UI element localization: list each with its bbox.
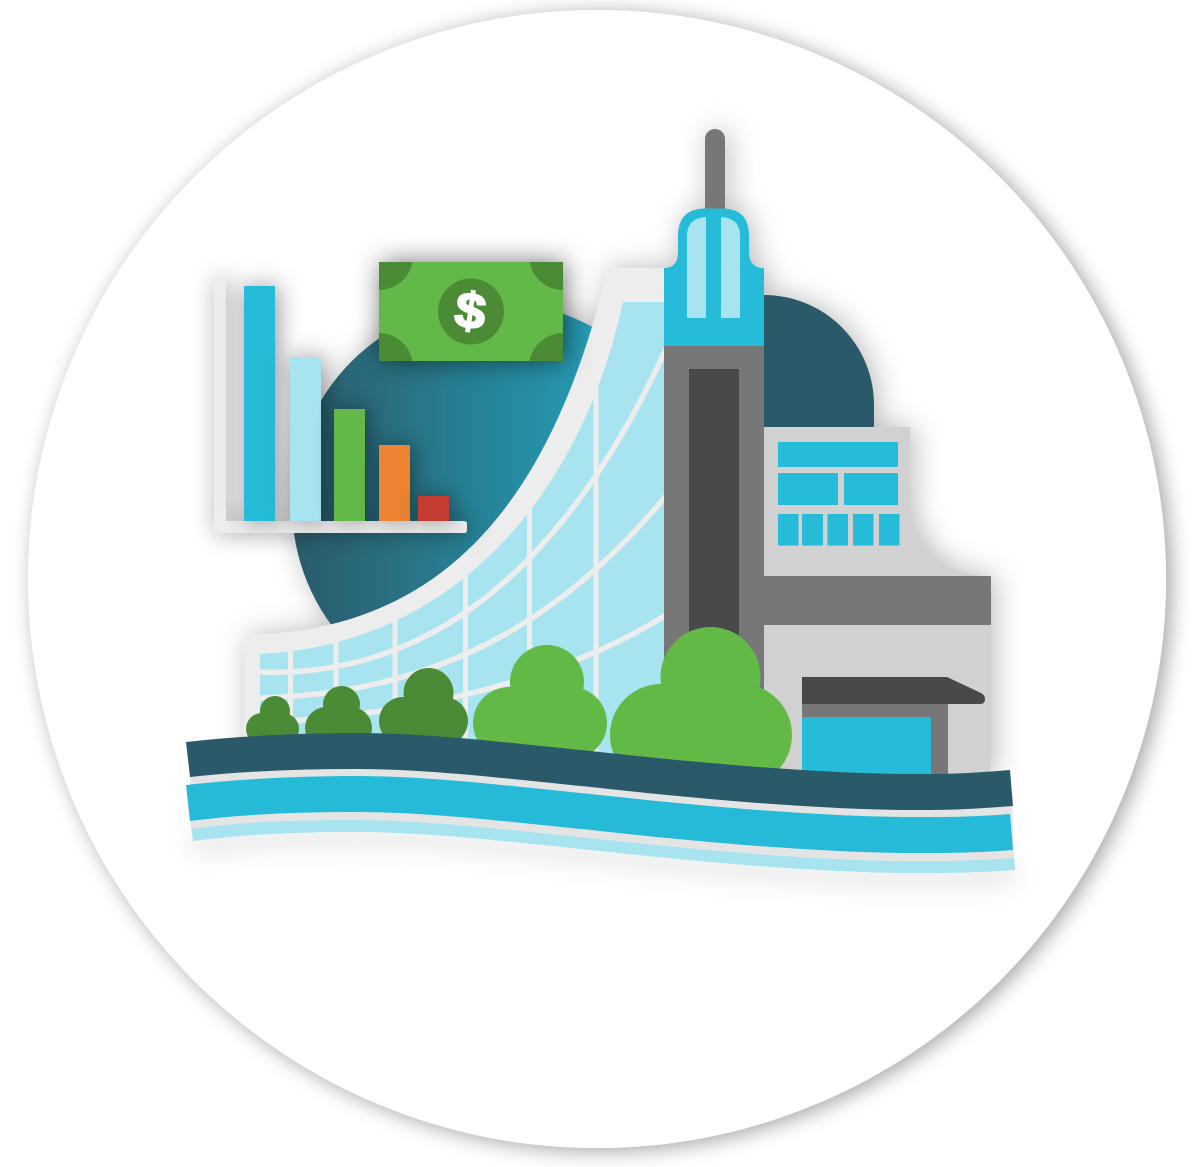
tree 3 xyxy=(379,668,468,745)
office windows xyxy=(778,442,900,546)
grey separator xyxy=(190,761,1014,861)
bar: green xyxy=(334,409,365,521)
teal globe behind buildings xyxy=(292,302,698,708)
trees xyxy=(246,627,792,786)
road and river bands xyxy=(186,733,1015,873)
tower body xyxy=(664,346,764,776)
light water band xyxy=(191,820,1015,873)
tree 4 xyxy=(473,645,607,759)
bar: orange xyxy=(379,445,410,521)
door frame xyxy=(802,700,948,775)
chart axis and shelf xyxy=(214,279,467,533)
antenna xyxy=(705,129,725,212)
dark road band xyxy=(186,733,1013,810)
tree 2 xyxy=(305,686,372,749)
cap window right xyxy=(721,217,740,318)
cap window left xyxy=(687,217,706,318)
tree 1 xyxy=(246,696,299,745)
bar: light blue xyxy=(290,357,321,521)
lower block xyxy=(764,625,991,775)
teal dome behind tower xyxy=(764,295,874,427)
upper office block xyxy=(764,427,990,576)
grey band xyxy=(764,576,991,625)
dollar bill xyxy=(362,243,584,378)
curved glass building xyxy=(244,268,666,770)
blue door xyxy=(802,717,931,775)
tower dark window xyxy=(689,369,739,669)
dollar sign: $ xyxy=(451,281,489,341)
blue water band xyxy=(186,776,1013,853)
cityscape xyxy=(244,129,991,776)
bar chart on shelf xyxy=(214,279,467,533)
tower cap xyxy=(664,208,764,346)
awning xyxy=(802,677,985,704)
bar: red xyxy=(418,496,449,521)
bar: blue xyxy=(244,286,275,521)
tree 5 xyxy=(610,627,792,786)
